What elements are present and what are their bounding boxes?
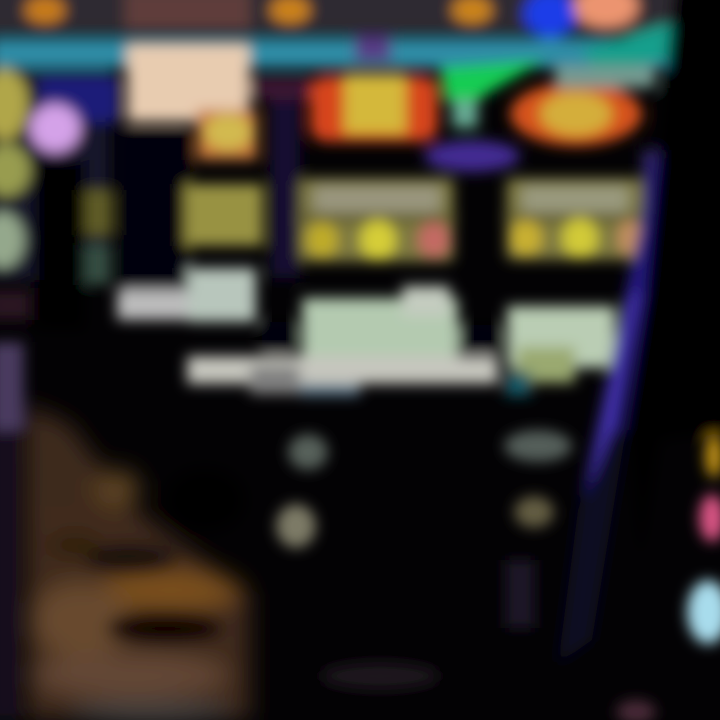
carpet floor	[24, 404, 250, 720]
right purple pillar	[558, 160, 666, 664]
centre reel screen	[296, 178, 456, 262]
teal header band	[0, 22, 680, 74]
button panels	[117, 268, 615, 396]
top lights strip	[0, 0, 680, 38]
left edge pillar	[0, 342, 24, 720]
right reel screen	[504, 178, 644, 260]
right black column	[630, 0, 720, 560]
centre machine topper	[310, 74, 438, 142]
floor dark shadows	[50, 468, 245, 641]
cabinet lights	[276, 430, 572, 690]
purple glow between machines	[424, 140, 662, 210]
left machine column	[0, 68, 120, 330]
centre-left machine	[120, 44, 310, 290]
green sign	[440, 60, 545, 128]
right machine topper	[510, 66, 655, 146]
neighbouring machine lights at right edge	[616, 434, 720, 720]
